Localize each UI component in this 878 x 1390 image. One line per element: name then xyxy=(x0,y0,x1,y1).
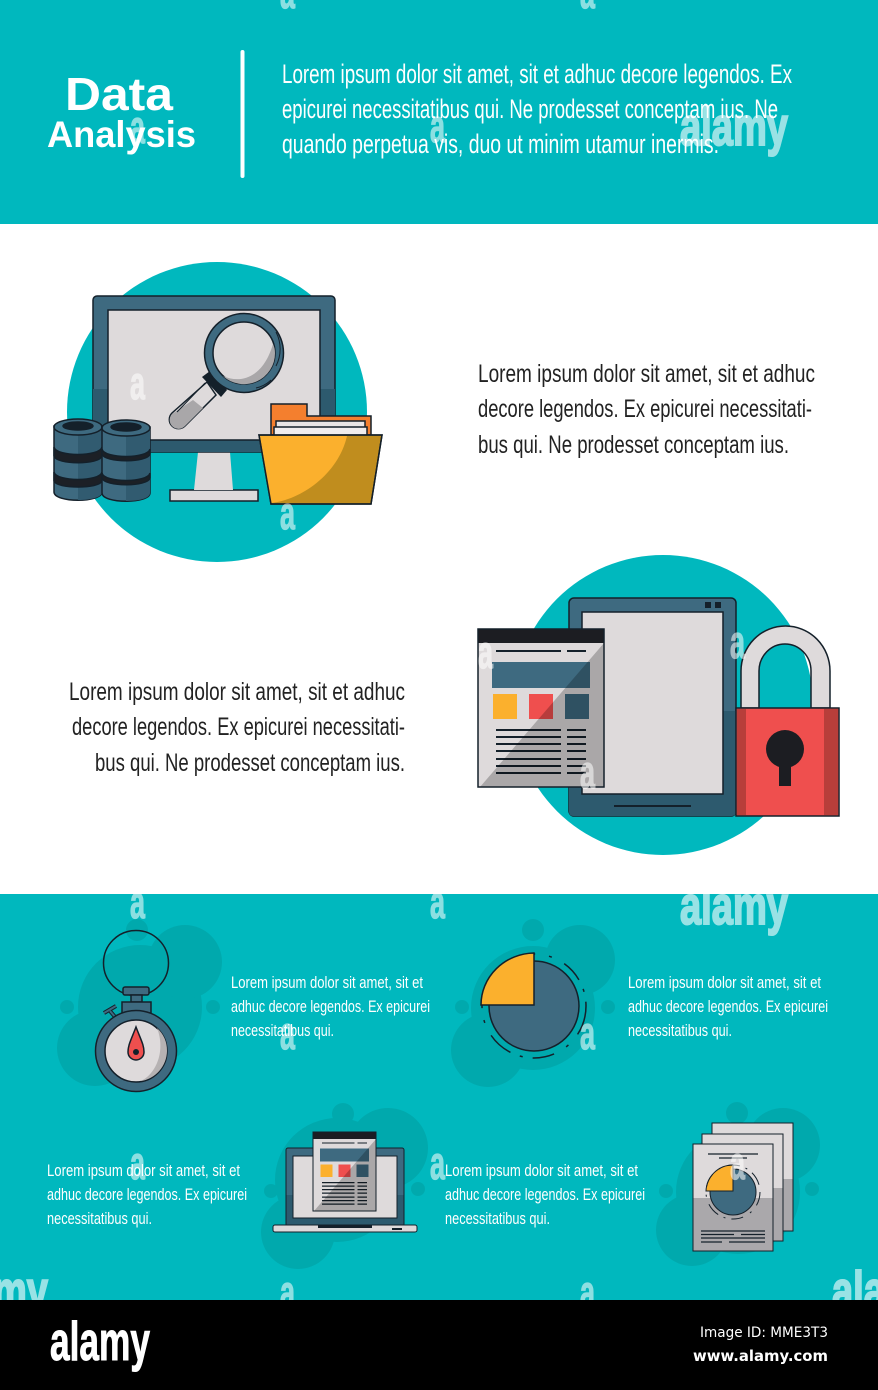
watermark marks: a xyxy=(280,1266,295,1318)
panel: pie chart item xyxy=(451,919,828,1087)
watermark marks: a xyxy=(280,1007,295,1059)
icon: tablet xyxy=(569,598,736,816)
watermark marks: a xyxy=(478,626,493,678)
watermark marks: alamy xyxy=(680,876,788,936)
title: Data xyxy=(65,68,173,120)
icon: document stack xyxy=(693,1123,793,1251)
icon: database stacks xyxy=(54,419,150,501)
watermark marks: a xyxy=(130,101,145,153)
text block xyxy=(628,973,828,1040)
watermark marks: a xyxy=(430,100,445,152)
icon: mini document page xyxy=(313,1132,376,1211)
icon: magnifying glass xyxy=(169,314,284,429)
text block: necessitatibus qui. xyxy=(445,1209,550,1228)
text block: Lorem ipsum dolor sit amet, sit et xyxy=(445,1161,638,1180)
header text block: quando perpetua vis, duo ut minim utamur inermis. xyxy=(282,129,719,159)
icon: laptop xyxy=(273,1148,417,1232)
header band xyxy=(0,0,878,224)
divider xyxy=(240,50,244,178)
text block: necessitatibus qui. xyxy=(47,1209,152,1228)
text block: left xyxy=(69,678,405,777)
text block: Lorem ipsum dolor sit amet, sit et xyxy=(231,973,423,992)
panel: documents item xyxy=(445,1102,820,1266)
watermark marks: a xyxy=(730,616,745,668)
panel: stopwatch item xyxy=(57,919,430,1092)
icon: monitor xyxy=(93,296,335,501)
text block xyxy=(445,1161,645,1228)
bottom teal band xyxy=(0,894,878,1300)
watermark marks: a xyxy=(580,1007,595,1059)
circle backdrop xyxy=(67,262,367,562)
footer logo: alamy xyxy=(50,1310,150,1372)
watermark marks: a xyxy=(430,1137,445,1189)
text block: left: Lorem ipsum dolor sit amet, sit et adhuc xyxy=(69,678,405,706)
watermark marks: a xyxy=(130,1137,145,1189)
website: www.alamy.com xyxy=(693,1347,828,1365)
circle backdrop xyxy=(513,555,813,855)
background blobs xyxy=(451,919,615,1087)
text block: Lorem ipsum dolor sit amet, sit et xyxy=(628,973,821,992)
background blobs xyxy=(261,1103,428,1269)
watermark marks: alamy xyxy=(680,97,788,157)
footer bar xyxy=(0,1300,878,1390)
text block: left: decore legendos. Ex epicurei necessitati- xyxy=(72,713,405,741)
title xyxy=(47,68,196,155)
text block xyxy=(47,1161,247,1228)
text block: right xyxy=(478,360,815,459)
background blobs xyxy=(57,919,222,1086)
text block: necessitatibus qui. xyxy=(231,1021,334,1040)
watermark marks: a xyxy=(130,876,145,928)
watermark marks: a xyxy=(580,1266,595,1318)
watermark marks: a xyxy=(280,487,295,539)
chart: pie xyxy=(481,953,586,1058)
text block: adhuc decore legendos. Ex epicurei xyxy=(231,997,430,1016)
text block: adhuc decore legendos. Ex epicurei xyxy=(47,1185,247,1204)
background blobs xyxy=(656,1102,820,1266)
text block: necessitatibus qui. xyxy=(628,1021,732,1040)
panel: laptop item xyxy=(47,1103,428,1269)
icon: stopwatch xyxy=(96,930,176,1092)
icon: document page xyxy=(478,629,604,787)
image id: Image ID: MME3T3 xyxy=(700,1325,828,1341)
watermark marks: a xyxy=(130,357,145,409)
text block: adhuc decore legendos. Ex epicurei xyxy=(445,1185,645,1204)
watermark marks: a xyxy=(430,876,445,928)
text block: left: bus qui. Ne prodesset conceptam ius. xyxy=(95,749,405,777)
icon: padlock xyxy=(736,626,839,816)
icon: folder xyxy=(259,404,382,504)
text block xyxy=(231,973,430,1040)
panel: monitor illustration xyxy=(54,262,382,562)
header text block xyxy=(282,59,792,159)
watermark marks: a xyxy=(580,746,595,798)
title: Analysis xyxy=(47,114,196,155)
panel: tablet and lock illustration xyxy=(478,555,839,855)
text block: Lorem ipsum dolor sit amet, sit et xyxy=(47,1161,240,1180)
watermark marks: a xyxy=(730,1137,745,1189)
